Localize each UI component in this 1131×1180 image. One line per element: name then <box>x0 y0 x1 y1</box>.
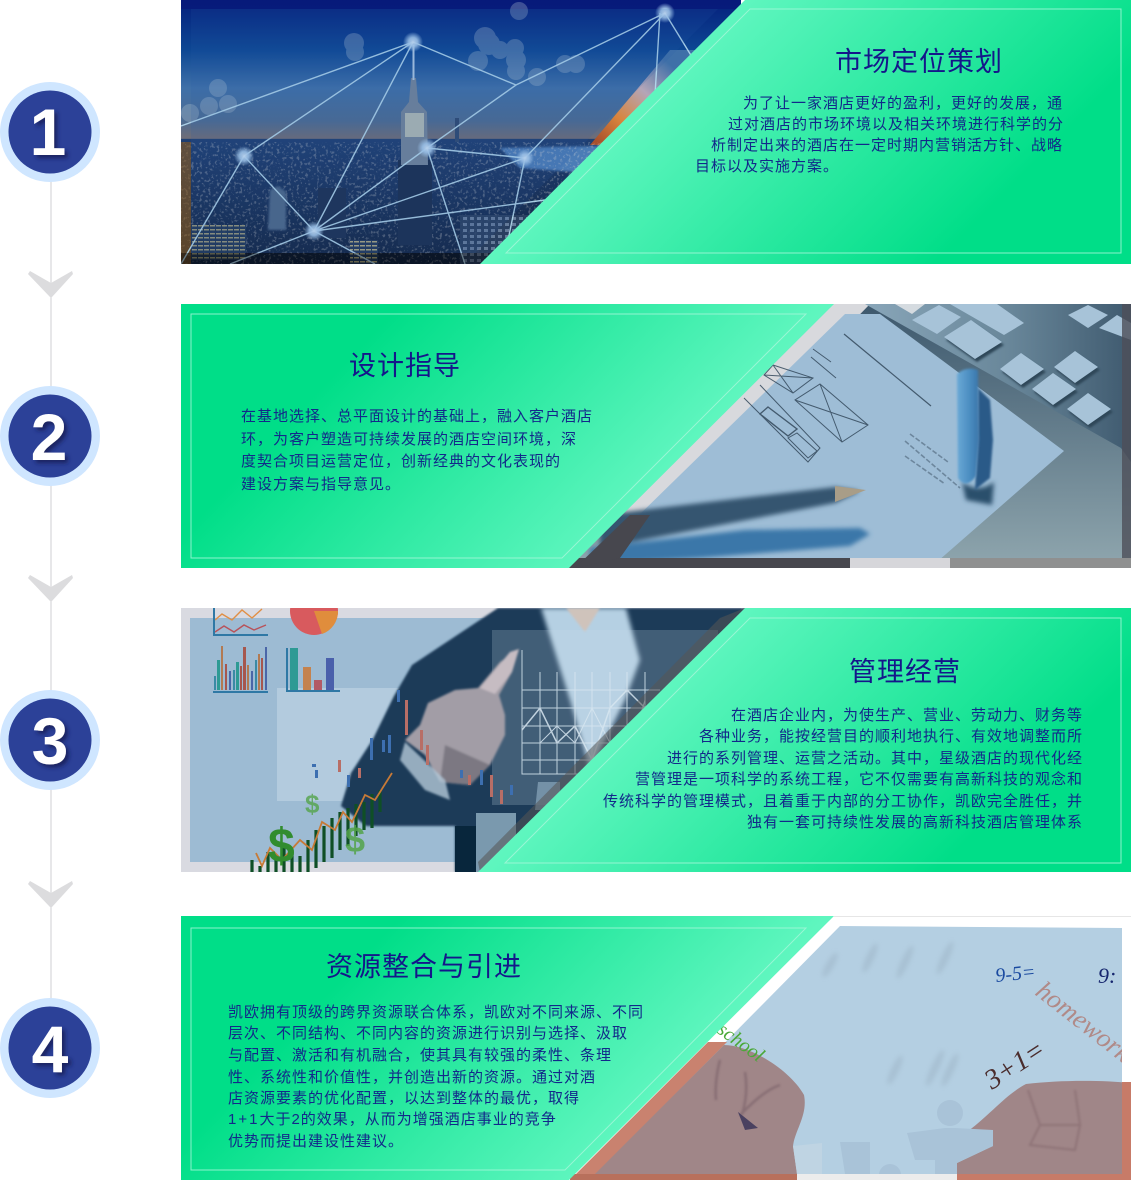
body text: 在基地选择、总平面设计的基础上，融入客户酒店 <box>241 408 593 425</box>
body text: 1+1大于2的效果，从而为增强酒店事业的竞争 <box>228 1110 557 1128</box>
body text <box>228 1004 644 1150</box>
body text: 营管理是一项科学的系统工程，它不仅需要有高新科技的观念和 <box>635 770 1083 788</box>
body text: 店资源要素的优化配置，以达到整体的最优，取得 <box>228 1090 580 1107</box>
heading: 管理经营 <box>849 657 961 687</box>
step badge 3 <box>0 690 100 790</box>
bokeh circles <box>181 2 585 122</box>
heading: 资源整合与引进 <box>326 952 522 982</box>
photo frame strips <box>1122 304 1131 568</box>
green text card <box>480 0 1131 264</box>
key shadows <box>946 323 1113 428</box>
step badge 3: 3 <box>32 704 68 778</box>
left hand <box>595 1045 805 1174</box>
step badge 1 <box>0 82 100 182</box>
right hand <box>957 1080 1122 1174</box>
blurred pencils <box>590 487 870 564</box>
heading: 市场定位策划 <box>835 47 1003 77</box>
body text: 环，为客户塑造可持续发展的酒店空间环境，深 <box>241 430 577 448</box>
body text: 与配置、激活和有机融合，使其具有较强的柔性、条理 <box>228 1046 612 1064</box>
dollar signs: $ <box>268 820 295 873</box>
blurred background marks <box>823 944 958 1084</box>
handwriting: school <box>713 1018 769 1067</box>
body text: 性、系统性和价值性，并创造出新的资源。通过对酒 <box>228 1069 596 1086</box>
handwriting <box>717 966 1122 1090</box>
photo: wireframe sketch, pencils and keyboard <box>560 304 1131 568</box>
photo: networked city skyline at dusk <box>181 0 741 264</box>
body text: 在酒店企业内，为使生产、营业、劳动力、财务等 <box>731 706 1083 724</box>
blue pen cap <box>962 482 994 505</box>
dollar signs <box>268 794 364 866</box>
pie chart <box>290 608 338 635</box>
network nodes <box>234 3 675 241</box>
body text: 独有一套可持续性发展的高新科技酒店管理体系 <box>747 814 1083 831</box>
panel: design guidance <box>181 304 1131 568</box>
chevron arrow 1 <box>28 271 73 297</box>
glass chart panel <box>492 630 718 805</box>
green text card <box>181 304 834 568</box>
panel: resource integration <box>181 916 1131 1180</box>
shirt <box>541 608 640 770</box>
wireframe sketches <box>744 334 960 488</box>
network lines <box>181 13 700 264</box>
body text: 凯欧拥有顶级的跨界资源联合体系，凯欧对不同来源、不同 <box>228 1004 644 1021</box>
timeline connector <box>50 170 52 1010</box>
body text: 析制定出来的酒店在一定时期内营销活方针、战略 <box>711 137 1063 154</box>
chevron arrow 2 <box>28 575 73 601</box>
step badge 4 <box>0 998 100 1098</box>
keyboard <box>865 304 1131 462</box>
body text: 建设方案与指导意见。 <box>241 475 401 493</box>
dollar signs: $ <box>345 819 365 860</box>
dollar signs: $ <box>305 789 320 819</box>
light outer strip <box>622 304 868 516</box>
body text: 目标以及实施方案。 <box>695 157 839 175</box>
body text <box>241 408 593 493</box>
step badge 2 <box>0 386 100 486</box>
heading: 设计指导 <box>349 351 461 381</box>
body text: 过对酒店的市场环境以及相关环境进行科学的分 <box>728 115 1064 133</box>
green text card <box>181 916 834 1180</box>
empire state tower <box>401 78 428 165</box>
chevron arrow 3 <box>28 881 73 907</box>
keys <box>895 304 1131 425</box>
body text: 为了让一家酒店更好的盈利，更好的发展，通 <box>743 95 1063 112</box>
panel: market positioning <box>181 0 1131 264</box>
body text: 优势而提出建设性建议。 <box>228 1133 404 1150</box>
hand <box>400 649 519 800</box>
step badge 2: 2 <box>31 400 67 474</box>
body text: 各种业务，能按经营目的顺利地执行、有效地调整而所 <box>699 728 1083 745</box>
handwriting: 9: <box>1098 963 1116 988</box>
step badge 4: 4 <box>32 1012 69 1086</box>
body text <box>695 95 1064 175</box>
panel: operations management <box>181 587 1131 873</box>
puzzle pieces <box>793 1100 993 1180</box>
orange strip <box>570 1042 727 1180</box>
bottom photo strip <box>570 1174 1131 1180</box>
photo: businessman pointing at holographic charts <box>181 608 745 872</box>
light panel <box>277 688 399 801</box>
green text card <box>478 608 1131 872</box>
photo: hands joining puzzle pieces over homework <box>560 916 1131 1180</box>
bar charts <box>213 646 340 693</box>
line chart top left <box>214 608 268 635</box>
suit <box>341 608 760 872</box>
rising market trend <box>252 773 392 872</box>
candlesticks <box>312 690 513 804</box>
body text: 传统科学的管理模式，且着重于内部的分工协作，凯欧完全胜任，并 <box>603 792 1083 810</box>
body text: 度契合项目运营定位，创新经典的文化表现的 <box>241 453 561 470</box>
body text: 进行的系列管理、运营之活动。其中，星级酒店的现代化经 <box>667 750 1083 767</box>
body text: 层次、不同结构、不同内容的资源进行识别与选择、汲取 <box>228 1025 628 1042</box>
handwriting: 3+1= <box>978 1034 1051 1096</box>
step badge 1: 1 <box>30 95 66 169</box>
handwriting: 9-5= <box>994 961 1036 987</box>
body text <box>603 706 1083 831</box>
